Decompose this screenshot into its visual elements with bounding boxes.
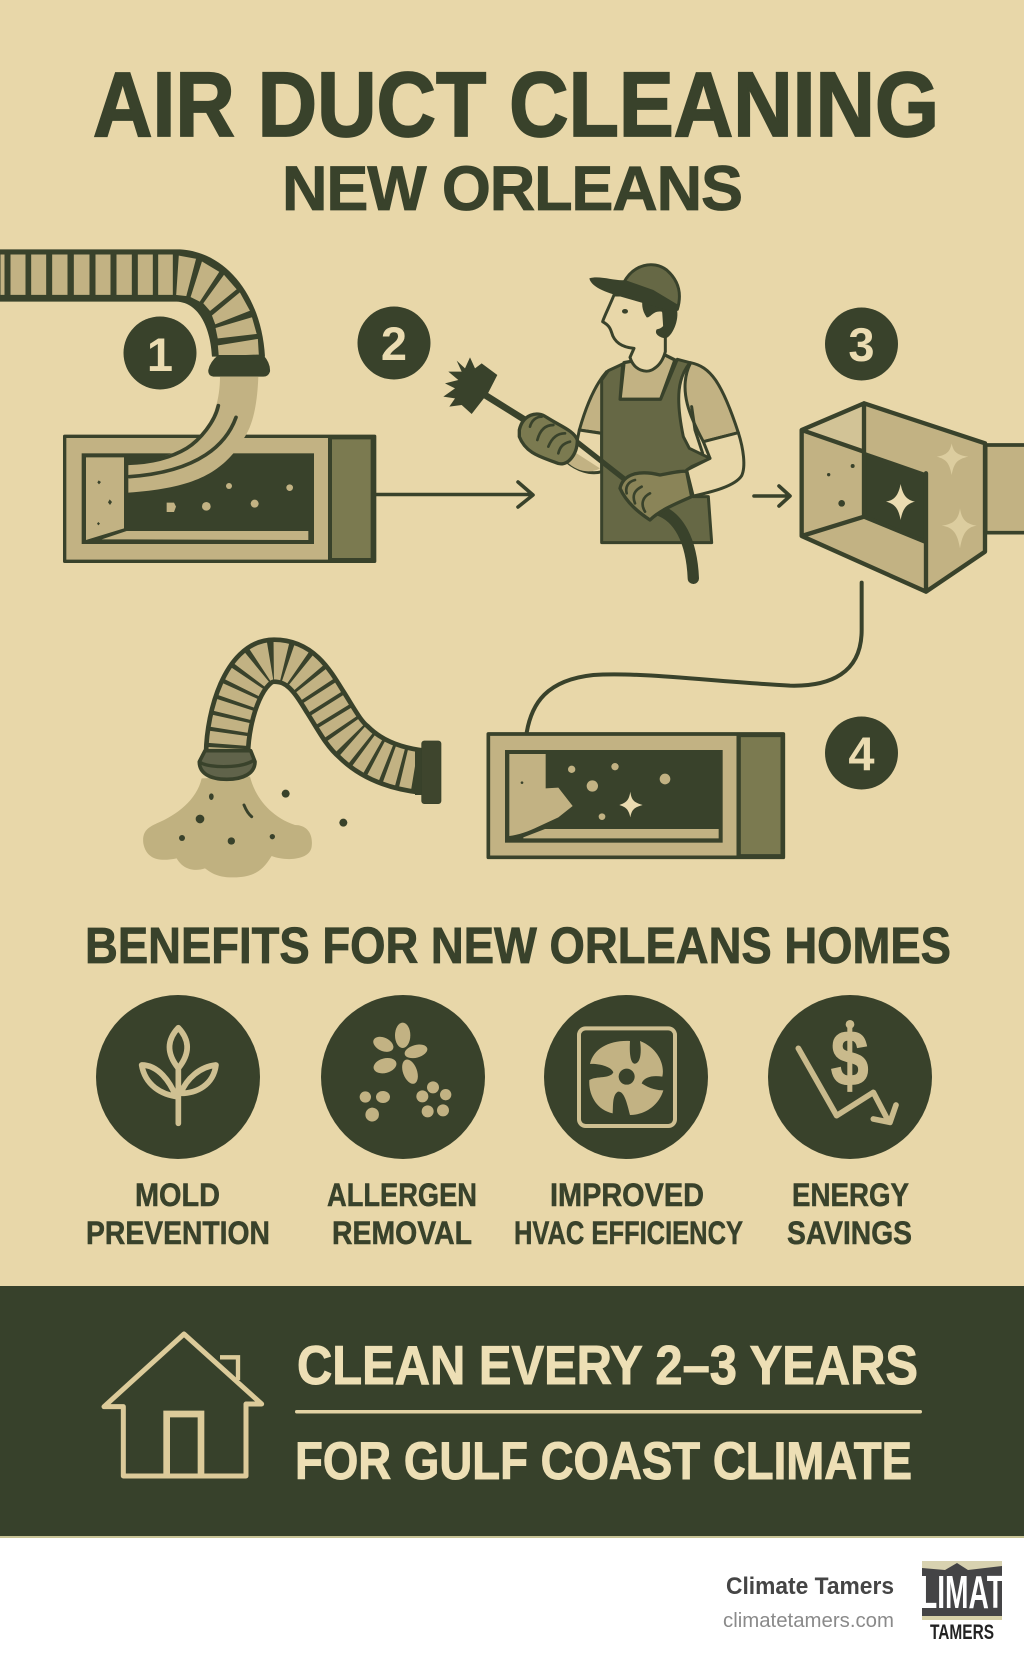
logo [920,1561,1004,1644]
benefit icon: HVAC fan [544,995,708,1159]
benefit label: improved hvac efficiency: IMPROVED [550,1177,704,1213]
benefit icon: energy savings [768,995,932,1159]
subtitle: NEW ORLEANS [282,154,743,224]
number badge 2: 2 [381,317,407,370]
gloved hands and hose [519,414,693,578]
duct box [65,436,375,561]
side duct [986,445,1024,533]
benefit label: energy savings: SAVINGS [787,1215,912,1251]
benefit label: mold prevention: PREVENTION [86,1215,270,1251]
arrow: step 1 to step 2 [376,482,533,507]
callout: clean every 2-3 years: CLEAN EVERY 2–3 YEARS [297,1334,918,1396]
number badge 4 [825,716,898,790]
ribbed hose [0,249,270,377]
benefit label: mold prevention: MOLD [135,1177,220,1213]
number badge 1: 1 [147,328,173,381]
title: AIR DUCT CLEANING [93,54,939,156]
head and cap [589,265,679,371]
number badge 3 [825,308,898,380]
benefit label: energy savings [787,1177,912,1251]
debris particles [179,790,347,845]
sparkles and specks [827,443,977,548]
benefit label: allergen removal: REMOVAL [332,1215,472,1251]
flexible hose into duct [128,377,258,493]
illustration: vacuum hose with debris [143,661,441,877]
number badge 4: 4 [848,727,875,780]
benefit label: improved hvac efficiency: HVAC EFFICIENCY [514,1215,743,1251]
arrow: step 2 to step 3 [754,486,790,506]
number badge 1 [124,316,196,390]
benefit icon: mold prevention [96,995,260,1159]
banner: cleaning frequency [0,1286,1024,1538]
cable [527,583,862,733]
brush [443,357,525,420]
illustration: step 3 clean duct cube [802,403,1024,592]
ribbed hose [227,661,441,804]
illustration: step 1 dirty duct with hose [0,249,375,561]
footer website: climatetamers.com [723,1609,894,1632]
number badge 2 [358,306,430,380]
benefit icon: energy savings: $ [831,1014,868,1102]
hose cuff [199,751,255,779]
benefit label: allergen removal: ALLERGEN [327,1177,477,1213]
callout: for gulf coast climate: FOR GULF COAST CLIMATE [295,1432,912,1491]
icon: house [104,1334,262,1476]
benefit label: mold prevention [86,1177,270,1251]
footer brand name: Climate Tamers [726,1573,894,1600]
dust cloud [143,777,312,877]
logo: TAMERS [930,1621,994,1644]
torso and arms [567,355,744,543]
cube faces [802,403,985,592]
benefit label: energy savings: ENERGY [792,1177,909,1213]
benefit label: improved hvac efficiency [514,1177,743,1251]
duct box [488,734,783,857]
benefit icon: allergen removal [321,995,485,1159]
illustration: step 4 finished duct with cable [488,583,862,857]
number badge 3: 3 [848,318,875,371]
illustration: technician with brush [443,265,744,578]
benefit label: allergen removal [327,1177,477,1251]
divider [295,1410,922,1414]
